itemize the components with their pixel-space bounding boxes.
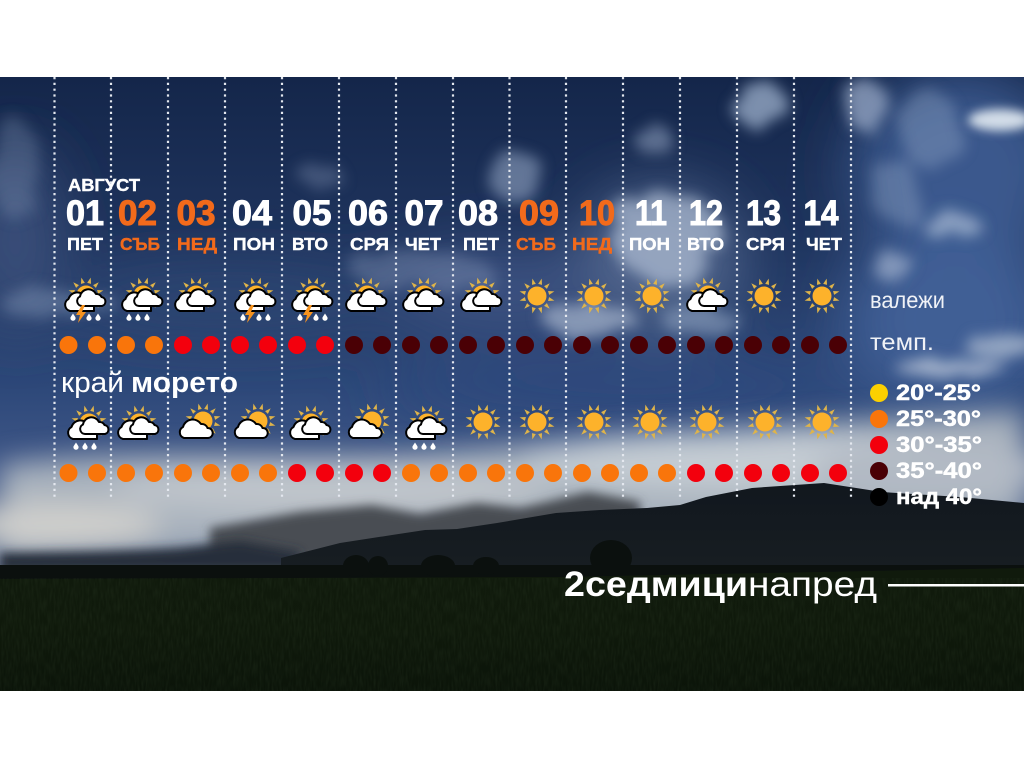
temperature dots: seaside row bbox=[60, 464, 847, 482]
icon: cloudy 07 bbox=[403, 277, 443, 313]
icon: sun 10 bbox=[576, 278, 612, 314]
icon: sun 14 bbox=[804, 278, 840, 314]
weekday labels: СРЯ bbox=[350, 234, 389, 254]
legend: 20-25: 20°-25° bbox=[896, 380, 981, 405]
tree line bbox=[0, 540, 1024, 580]
mountain ridge bbox=[281, 483, 1024, 565]
date numbers: 04 bbox=[232, 194, 273, 233]
date numbers: 10 bbox=[579, 194, 615, 233]
date numbers: 06 bbox=[348, 194, 388, 233]
legend: 30-35: 30°-35° bbox=[896, 432, 982, 457]
date numbers: 11 bbox=[635, 194, 667, 233]
icon: partly sunny 04 bbox=[235, 403, 276, 439]
weekday labels: ВТО bbox=[292, 234, 328, 254]
temperature legend bbox=[870, 380, 982, 509]
row label: precipitation: валежи bbox=[870, 287, 945, 313]
icon: cloudy 05 bbox=[290, 405, 330, 441]
date numbers bbox=[66, 194, 839, 233]
temperature dots: inland row bbox=[60, 336, 847, 354]
date numbers: 01 bbox=[66, 194, 104, 233]
icon: cloudy 08 bbox=[461, 277, 501, 313]
icon: storm 05 bbox=[292, 277, 332, 323]
icon: rain 07 bbox=[406, 405, 446, 450]
date numbers: 08 bbox=[458, 194, 498, 233]
date numbers: 02 bbox=[118, 194, 157, 233]
footer title: 2седмици bbox=[564, 565, 748, 604]
field bbox=[0, 568, 1024, 691]
weekday labels: НЕД bbox=[572, 234, 613, 254]
legend: 35-40: 35°-40° bbox=[896, 458, 982, 483]
weekday labels: ВТО bbox=[687, 234, 724, 254]
footer line bbox=[888, 584, 1024, 586]
date numbers: 13 bbox=[746, 194, 781, 233]
weekday labels: ПЕТ bbox=[463, 234, 499, 254]
weekday labels: ПЕТ bbox=[67, 234, 103, 254]
icon: cloudy 06 bbox=[346, 277, 386, 313]
legend: 25-30: 25°-30° bbox=[896, 406, 981, 431]
dotted day separators bbox=[54, 77, 851, 497]
date numbers: 05 bbox=[292, 194, 332, 233]
icon: sun 11 bbox=[634, 278, 670, 314]
icon: storm 04 bbox=[235, 277, 275, 323]
icon: sun 10 bbox=[576, 404, 612, 440]
weather icons: seaside row bbox=[68, 403, 840, 450]
icon: sun 13 bbox=[746, 278, 782, 314]
icon: sun 12 bbox=[689, 404, 725, 440]
date numbers: 09 bbox=[519, 194, 559, 233]
icon: sun 09 bbox=[519, 404, 555, 440]
footer title: напред bbox=[748, 565, 877, 604]
date numbers: 07 bbox=[404, 194, 444, 233]
weekday labels: ПОН bbox=[629, 234, 670, 254]
icon: sun 08 bbox=[465, 404, 501, 440]
icon: rain 01 bbox=[68, 405, 108, 450]
icon: rain 02 bbox=[122, 277, 162, 321]
icon: cloudy 02 bbox=[118, 405, 158, 441]
distant hills and cloud-covered peaks bbox=[0, 492, 640, 572]
weather icons: inland row bbox=[65, 277, 840, 323]
icon: partly sunny 03 bbox=[180, 403, 221, 439]
weekday labels: СЪБ bbox=[120, 234, 160, 254]
date numbers: 14 bbox=[804, 194, 839, 233]
weekday labels: СЪБ bbox=[516, 234, 556, 254]
month heading: АВГУСТ bbox=[68, 175, 140, 195]
weekday labels: НЕД bbox=[177, 234, 218, 254]
icon: sun 13 bbox=[747, 404, 783, 440]
row label: temperature: темп. bbox=[870, 329, 934, 355]
icon: cloudy 12 bbox=[687, 277, 727, 313]
seaside heading: морето bbox=[131, 367, 238, 399]
weekday labels bbox=[67, 234, 842, 254]
icon: partly sunny 06 bbox=[349, 403, 390, 439]
icon: sun 11 bbox=[632, 404, 668, 440]
date numbers: 03 bbox=[176, 194, 216, 233]
legend: over 40: над 40° bbox=[896, 484, 982, 509]
weekday labels: ПОН bbox=[233, 234, 275, 254]
icon: sun 09 bbox=[519, 278, 555, 314]
seaside heading: край bbox=[61, 367, 124, 399]
bright cloud, upper right bbox=[968, 109, 1024, 131]
weekday labels: ЧЕТ bbox=[405, 234, 441, 254]
icon: cloudy 03 bbox=[175, 277, 215, 313]
weekday labels: ЧЕТ bbox=[806, 234, 842, 254]
date numbers: 12 bbox=[689, 194, 723, 233]
icon: storm 01 bbox=[65, 277, 105, 323]
weekday labels: СРЯ bbox=[746, 234, 785, 254]
icon: sun 14 bbox=[804, 404, 840, 440]
